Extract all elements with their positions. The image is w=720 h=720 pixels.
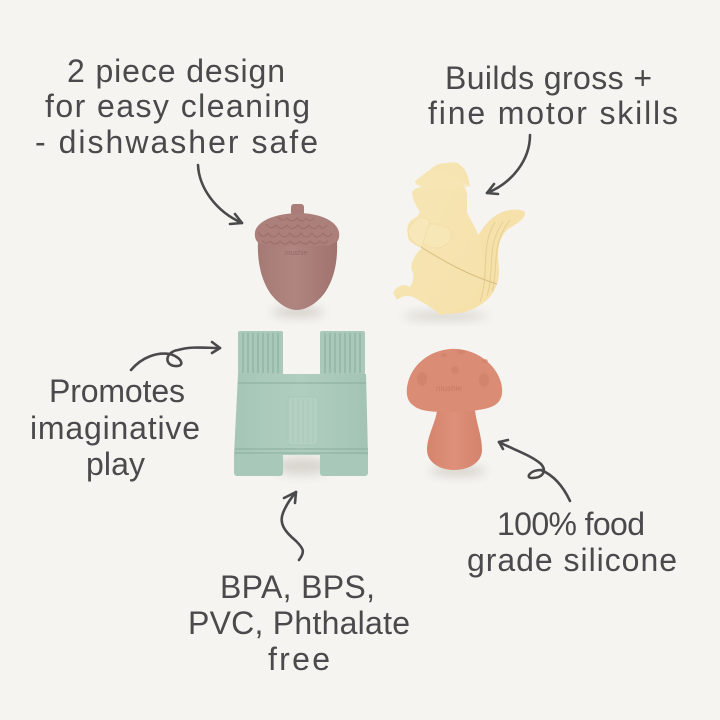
text: 100% food grade silicone: grade silicone <box>467 542 677 578</box>
text: 2 piece design for easy cleaning - dishwasher safe <box>35 53 318 160</box>
arrow: to binoculars <box>131 342 220 370</box>
icon: acorn toy <box>255 204 339 317</box>
arrow: to squirrel <box>487 135 530 194</box>
text: promotes imaginative play <box>30 373 200 482</box>
text: builds gross + fine motor skills: fine motor skills <box>428 95 678 131</box>
arrow: to binoculars from below <box>282 492 303 560</box>
icon: mushroom toy: mushie <box>436 384 462 393</box>
text: 100% food grade silicone: 100% food <box>497 506 645 542</box>
text: BPA, BPS, PVC, Phthalate free: BPA, BPS, <box>220 569 375 605</box>
text: builds gross + fine motor skills <box>428 60 678 131</box>
arrow: to acorn <box>198 165 242 224</box>
text: 2 piece design for easy cleaning - dishwasher safe: 2 piece design <box>67 53 285 89</box>
text: 100% food grade silicone <box>467 506 677 578</box>
text: 2 piece design for easy cleaning - dishwasher safe: - dishwasher safe <box>35 124 318 160</box>
text: promotes imaginative play: Promotes <box>49 373 185 409</box>
text: 2 piece design for easy cleaning - dishwasher safe: for easy cleaning <box>45 88 310 124</box>
text: builds gross + fine motor skills: Builds gross + <box>445 60 652 96</box>
text: BPA, BPS, PVC, Phthalate free: free <box>268 641 330 677</box>
icon: squirrel toy <box>393 162 525 320</box>
text: promotes imaginative play: imaginative <box>30 410 200 446</box>
text: BPA, BPS, PVC, Phthalate free: PVC, Phthalate <box>188 605 410 641</box>
text: BPA, BPS, PVC, Phthalate free <box>188 569 410 677</box>
arrow: to mushroom <box>499 440 570 501</box>
icon: binoculars toy <box>234 331 368 476</box>
icon: acorn toy: mushie <box>285 250 308 257</box>
text: promotes imaginative play: play <box>86 446 145 482</box>
icon: mushroom toy <box>407 349 502 476</box>
